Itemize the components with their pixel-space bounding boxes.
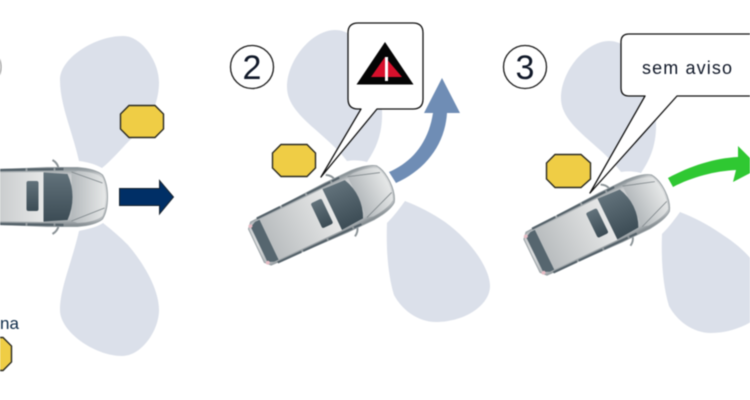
callout text: sem aviso bbox=[642, 58, 732, 78]
obstacle octagon bbox=[120, 106, 164, 138]
number 3: 3 bbox=[516, 49, 534, 87]
partial number circle bbox=[0, 45, 1, 89]
panel: scene 1 bbox=[0, 36, 174, 370]
panel: scene 2 bbox=[230, 23, 490, 322]
sensor zone top bbox=[60, 36, 159, 168]
car bbox=[517, 160, 680, 286]
direction arrow bbox=[120, 180, 174, 214]
legend octagon bbox=[0, 338, 12, 370]
number 2 bbox=[230, 46, 274, 88]
sensor zone bottom bbox=[387, 201, 490, 322]
curved blue arrow bbox=[389, 78, 460, 183]
sensor zone top bbox=[287, 30, 382, 162]
obstacle octagon bbox=[546, 154, 590, 188]
legend text fragment: na bbox=[0, 314, 19, 333]
number 3 bbox=[504, 46, 546, 88]
no warning callout bbox=[590, 34, 750, 193]
panel: scene 3 bbox=[504, 34, 750, 333]
car bbox=[0, 160, 108, 234]
warning callout bbox=[321, 23, 423, 177]
car bbox=[242, 151, 405, 276]
sensor zone bottom bbox=[662, 212, 750, 333]
warning icon bbox=[356, 42, 414, 84]
number 2: 2 bbox=[243, 49, 261, 87]
curved green arrow bbox=[668, 146, 750, 187]
sensor zone bottom bbox=[60, 223, 159, 356]
obstacle octagon bbox=[272, 144, 316, 176]
sensor zone top bbox=[561, 41, 656, 173]
